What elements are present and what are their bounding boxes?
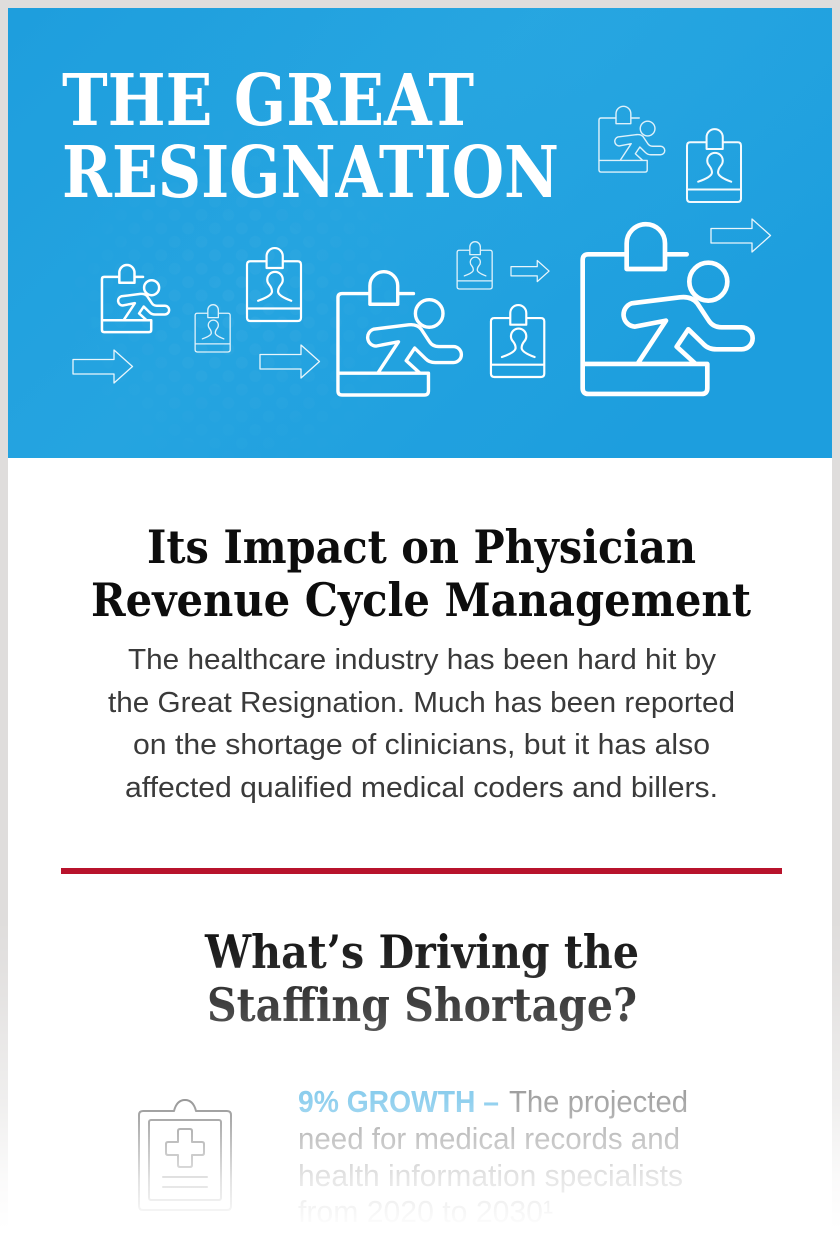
- text block: intro: [108, 644, 735, 804]
- icon: id badge, left: [247, 248, 301, 321]
- text block: 9% growth: from 2020 to 2030¹: [298, 1195, 553, 1229]
- icon: arrow, small: [511, 260, 549, 282]
- heading: staffing shortage: [204, 925, 639, 1032]
- white content panel: [8, 458, 832, 1260]
- panel: hero banner: [8, 8, 832, 458]
- icon: id badge, centre right: [491, 305, 544, 377]
- heading: staffing shortage: Staffing Shortage?: [207, 978, 637, 1032]
- text block: intro: on the shortage of clinicians, but it has also: [133, 729, 710, 761]
- title: RESIGNATION: [62, 130, 559, 214]
- heading: staffing shortage: What’s Driving the: [204, 925, 639, 979]
- icon: arrow, bottom left: [73, 350, 132, 383]
- title: THE GREAT: [62, 58, 474, 142]
- text block: 9% growth: 9% GROWTH –: [298, 1085, 499, 1119]
- icon: arrow, top right: [711, 219, 770, 252]
- heading: impact: Its Impact on Physician: [147, 520, 696, 574]
- title: [62, 58, 559, 214]
- icon: arrow, middle: [260, 345, 320, 378]
- icon: running figure, medium: [338, 272, 461, 395]
- text block: intro: the Great Resignation. Much has been reported: [108, 687, 735, 719]
- heading: impact: Revenue Cycle Management: [91, 573, 752, 627]
- text block: intro: affected qualified medical coders and billers.: [125, 772, 718, 804]
- text block: 9% growth: health information specialists: [298, 1159, 683, 1193]
- bottom fade: [0, 920, 840, 1260]
- heading: impact: [91, 520, 752, 627]
- text block: 9% growth: [298, 1085, 688, 1229]
- icon: running figure, left small: [102, 265, 169, 332]
- text block: 9% growth: The projected: [509, 1085, 688, 1119]
- red divider: [61, 868, 782, 874]
- text block: intro: The healthcare industry has been hard hit by: [128, 644, 717, 676]
- icon: running figure, large: [583, 224, 753, 394]
- icon: running figure, top small: [599, 106, 665, 172]
- icon: id badge, top right: [687, 129, 741, 202]
- icon: medical clipboard: [139, 1100, 231, 1210]
- icon: id badge, small left: [195, 305, 230, 352]
- icon: id badge, small centre: [457, 242, 492, 289]
- text block: 9% growth: need for medical records and: [298, 1122, 680, 1156]
